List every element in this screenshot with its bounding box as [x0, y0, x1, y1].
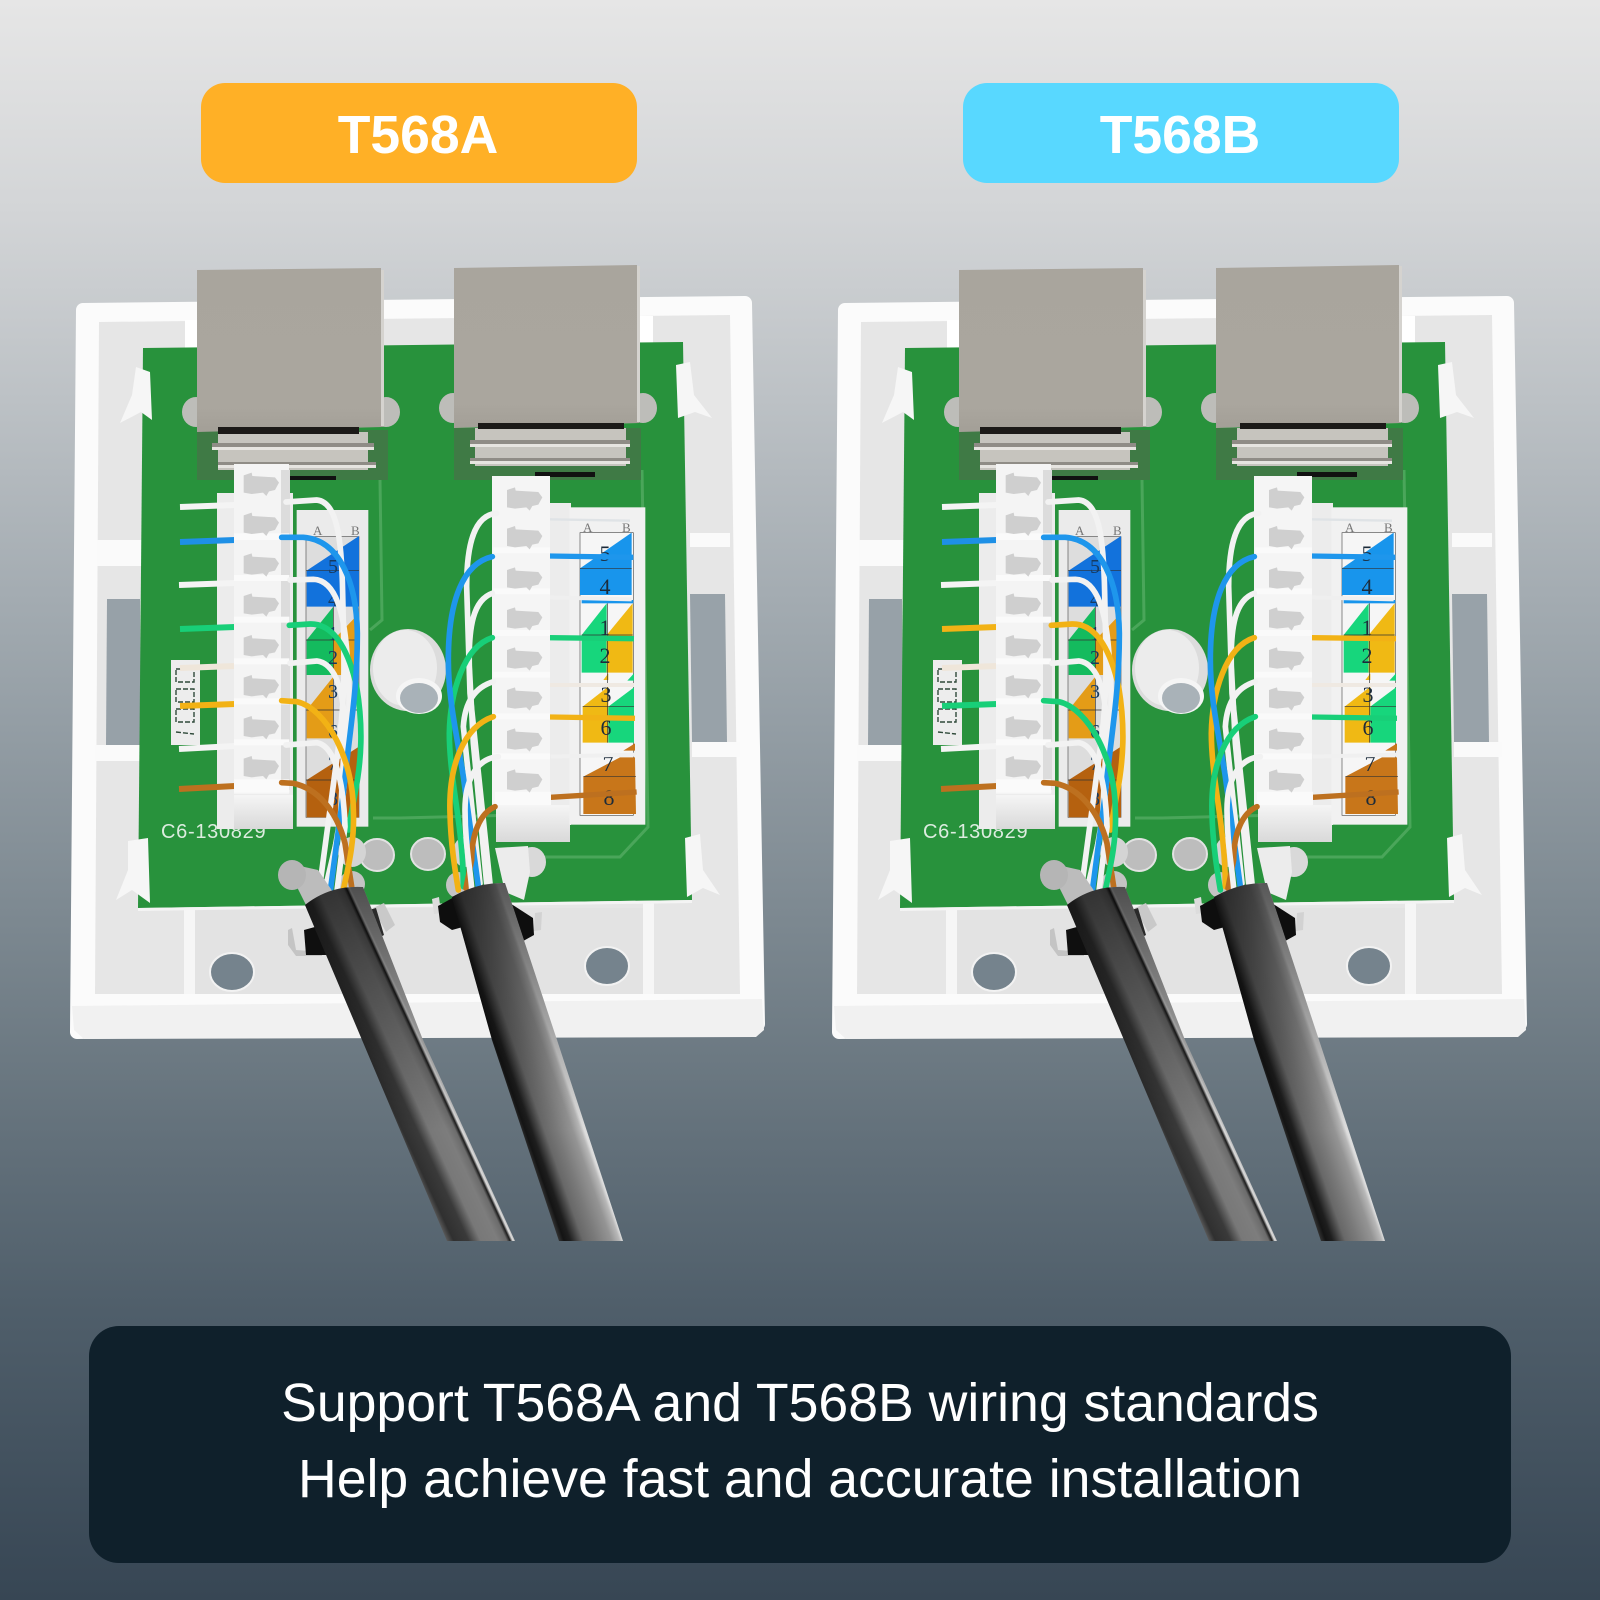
left block punched wires: [282, 500, 361, 897]
left colour code card: 7: [1090, 753, 1100, 775]
right colour code card: 3: [600, 682, 612, 707]
left colour code card: 5: [328, 556, 338, 578]
left colour code card: [1059, 510, 1130, 827]
right colour code card: 7: [602, 751, 614, 776]
right colour code card: 3: [1362, 682, 1374, 707]
badge: T568A: T568A: [338, 106, 498, 165]
left colour code card: [297, 510, 368, 827]
left colour code card: 8: [1090, 788, 1100, 810]
badge: T568B: [963, 83, 1399, 183]
right colour code card: 2: [600, 643, 610, 668]
right terminal block base: [496, 503, 571, 842]
right colour code card: 2: [1362, 643, 1372, 668]
badge: T568A: [201, 83, 637, 183]
right block wire stubs: [1310, 519, 1399, 797]
right colour code card: 5: [1362, 541, 1372, 566]
caption banner: Support T568A and T568B wiring standards: [281, 1373, 1319, 1433]
RJ45 jacks: [182, 265, 657, 480]
board label: C6-130829: [161, 821, 266, 843]
left colour code card: 2: [1090, 647, 1100, 669]
black network cables: [1040, 846, 1385, 1241]
left colour code card: B: [1113, 523, 1122, 538]
left colour code card: A: [313, 523, 323, 538]
left colour code card: 4: [1090, 589, 1100, 611]
right colour code card: B: [1384, 520, 1393, 535]
left terminal block base: [979, 493, 1055, 829]
left colour code card: 5: [1090, 556, 1100, 578]
caption banner: [89, 1326, 1511, 1563]
white wall plate housing: [834, 303, 1526, 1039]
right terminal block: [492, 476, 551, 806]
left colour code card: 7: [328, 753, 338, 775]
panel: T568A keystone wall plate: [72, 265, 764, 1241]
left colour code card: 6: [328, 721, 338, 743]
left colour code card: 4: [328, 589, 338, 611]
right colour code card: 8: [1366, 785, 1376, 810]
left block punched wires: [1044, 500, 1123, 897]
right terminal block: [1254, 476, 1313, 806]
right colour code card: 4: [600, 574, 610, 599]
left terminal block: [234, 464, 290, 794]
right colour code card: [1331, 507, 1407, 825]
right colour code card: A: [583, 520, 593, 535]
left colour code card: 2: [328, 647, 338, 669]
right colour code card: 5: [600, 541, 610, 566]
left block outgoing wires: [179, 505, 235, 789]
left terminal block base: [217, 493, 293, 829]
right colour code card: 6: [600, 715, 612, 740]
badge: T568B: T568B: [1100, 106, 1260, 165]
left colour code card: 3: [328, 681, 338, 703]
right block punched wires: [1210, 513, 1260, 890]
left block outgoing wires: [941, 505, 997, 789]
green circuit board: [116, 342, 720, 911]
right terminal block base: [1258, 503, 1333, 842]
right colour code card: B: [622, 520, 631, 535]
right colour code card: [569, 507, 645, 825]
right colour code card: 1: [1362, 615, 1372, 640]
right colour code card: 8: [604, 785, 614, 810]
right colour code card: 6: [1362, 715, 1374, 740]
right colour code card: 1: [600, 615, 610, 640]
left colour code card: 1: [328, 623, 338, 645]
panel: T568B keystone wall plate: [834, 265, 1526, 1241]
right colour code card: 7: [1364, 751, 1376, 776]
left colour code card: 1: [1090, 623, 1100, 645]
white wall plate housing: [72, 303, 764, 1039]
right colour code card: A: [1345, 520, 1355, 535]
right colour code card: 4: [1362, 574, 1372, 599]
left colour code card: 8: [328, 788, 338, 810]
left colour code card: 3: [1090, 681, 1100, 703]
board label: C6-130829: [923, 821, 1028, 843]
RJ45 jacks: [944, 265, 1419, 480]
green circuit board: [878, 342, 1482, 911]
right block punched wires: [448, 513, 498, 890]
left colour code card: A: [1075, 523, 1085, 538]
chip label: [933, 660, 962, 745]
black network cables: [278, 846, 623, 1241]
caption banner: Help achieve fast and accurate installation: [298, 1449, 1302, 1509]
right block wire stubs: [548, 519, 637, 797]
left colour code card: B: [351, 523, 360, 538]
left colour code card: 6: [1090, 721, 1100, 743]
left terminal block: [996, 464, 1052, 794]
chip label: [171, 660, 200, 745]
